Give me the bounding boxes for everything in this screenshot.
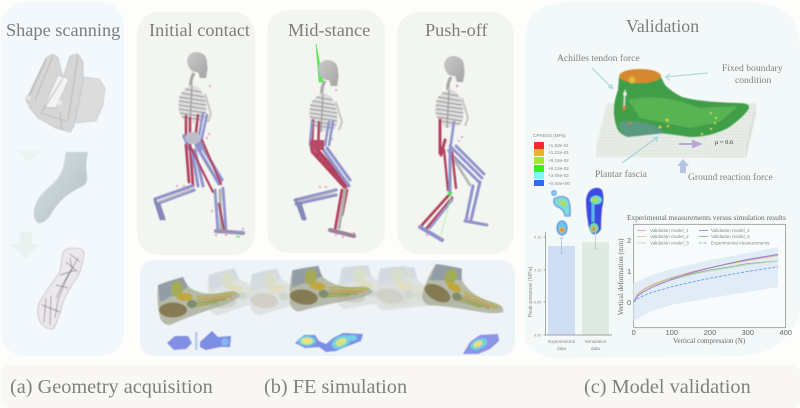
legend: CPRESS: +6.12e-02 <box>548 166 569 171</box>
legend: CPRESS: CPRESS (MPa) <box>533 133 566 138</box>
line chart: measurements versus simulation: Validation model_4 <box>711 228 750 233</box>
bar chart: peak pressure: data <box>591 346 600 351</box>
pressure map: mid-stance <box>295 332 363 352</box>
line chart: measurements versus simulation: 200 <box>704 328 716 337</box>
legend: CPRESS: +9.18e-02 <box>548 158 569 163</box>
line chart: measurements versus simulation: 2 <box>627 236 631 245</box>
heading: validation: Validation <box>626 16 699 36</box>
line chart: measurements versus simulation: Validation model_5 <box>711 234 750 239</box>
label: ground reaction force: Ground reaction force <box>688 172 773 183</box>
figure: skeleton mid-stance <box>295 60 355 238</box>
line chart: measurements versus simulation: 400 <box>779 328 792 337</box>
legend: CPRESS: +1.53e-01 <box>548 143 569 148</box>
line chart: measurements versus simulation: Validation model_2 <box>650 234 689 239</box>
legend: CPRESS: +1.22e-01 <box>548 150 569 155</box>
arrow: achilles tendon force <box>592 68 613 89</box>
label: plantar fascia: Plantar fascia <box>595 169 648 180</box>
panel: push-off <box>397 12 514 254</box>
label: achilles tendon force: Achilles tendon force <box>557 53 640 64</box>
heading: push-off: Push-off <box>425 20 489 40</box>
arrow: plantar fascia <box>622 137 658 163</box>
bar chart: peak pressure: 0.15 <box>534 236 541 240</box>
pressure map: push-off <box>463 334 499 354</box>
legend: CPRESS <box>533 133 570 186</box>
pressure map: initial contact <box>167 331 231 350</box>
line chart: measurements versus simulation: Experimental measurements versus simulation results <box>627 213 786 222</box>
icon: foot at initial contact <box>157 277 240 325</box>
label: fixed boundary condition: condition <box>735 75 771 86</box>
figure: skeleton initial contact <box>155 52 244 238</box>
footer band <box>1 365 800 408</box>
icon: foot at mid-stance <box>286 262 375 321</box>
bar chart: peak pressure: 0.10 <box>534 268 541 272</box>
icon: scanner device <box>26 54 105 132</box>
line chart: measurements versus simulation: 1 <box>627 267 631 276</box>
icon: green foot model <box>614 69 749 137</box>
plate with grid <box>596 103 756 158</box>
panel: validation <box>525 2 800 358</box>
arrow: fixed boundary <box>665 73 708 80</box>
bar chart: peak pressure: Peak pressure (MPa) <box>528 266 534 317</box>
figure: skeleton push-off <box>418 56 488 240</box>
panel: foot FE sequence <box>140 257 515 356</box>
bar chart: peak pressure: Experimental <box>548 339 575 344</box>
heading: mid-stance: Mid-stance <box>288 20 370 40</box>
caption a: (a) Geometry acquisition <box>10 376 213 398</box>
arrow: scan to surface <box>16 150 43 162</box>
label: friction coefficient: μ = 0.6 <box>715 139 734 146</box>
panel: shape scanning <box>1 2 124 356</box>
line chart: measurements versus simulation: Vertical deformation (mm) <box>617 238 625 316</box>
line chart: measurements versus simulation: 300 <box>741 328 754 337</box>
legend: CPRESS: +3.06e-02 <box>548 173 569 178</box>
line chart: measurements versus simulation <box>617 213 792 345</box>
line chart: measurements versus simulation: 100 <box>665 328 678 337</box>
bar chart: peak pressure: Simulation <box>585 339 607 344</box>
bar chart: peak pressure <box>528 226 612 351</box>
caption c: (c) Model validation <box>584 376 751 398</box>
pressure map: experimental footprint <box>552 191 570 235</box>
arrow: friction direction <box>679 141 700 147</box>
heading: initial contact: Initial contact <box>149 20 250 40</box>
bar chart: peak pressure: data <box>557 346 566 351</box>
line chart: measurements versus simulation: Validation model_1 <box>650 228 689 233</box>
panel: mid-stance <box>267 10 385 253</box>
line chart: measurements versus simulation: Validation model_3 <box>650 240 689 246</box>
arrow: ground reaction force <box>677 159 689 173</box>
icon: green force vector <box>316 44 323 82</box>
arrow: surface to bones <box>10 232 40 259</box>
line chart: measurements versus simulation: 0 <box>632 328 636 337</box>
icon: ghost foot frames <box>206 260 470 329</box>
icon: foot bone geometry <box>38 248 84 329</box>
line chart: measurements versus simulation: 0 <box>627 298 631 307</box>
icon: scanned foot surface <box>34 152 88 223</box>
pressure map: simulated footprint <box>586 188 604 234</box>
line chart: measurements versus simulation: Vertical compression (N) <box>673 337 746 345</box>
caption b: (b) FE simulation <box>264 376 407 398</box>
legend: CPRESS: +0.00e+00 <box>548 181 570 186</box>
line chart: measurements versus simulation: Experimental measurements <box>711 240 770 246</box>
panel: initial contact <box>137 12 255 255</box>
bar chart: peak pressure: 0.05 <box>534 300 541 304</box>
heading: shape scanning: Shape scanning <box>6 20 120 40</box>
icon: foot at push-off <box>417 257 512 338</box>
bar chart: peak pressure: 0.00 <box>534 334 541 338</box>
label: fixed boundary condition: Fixed boundary <box>722 63 782 74</box>
